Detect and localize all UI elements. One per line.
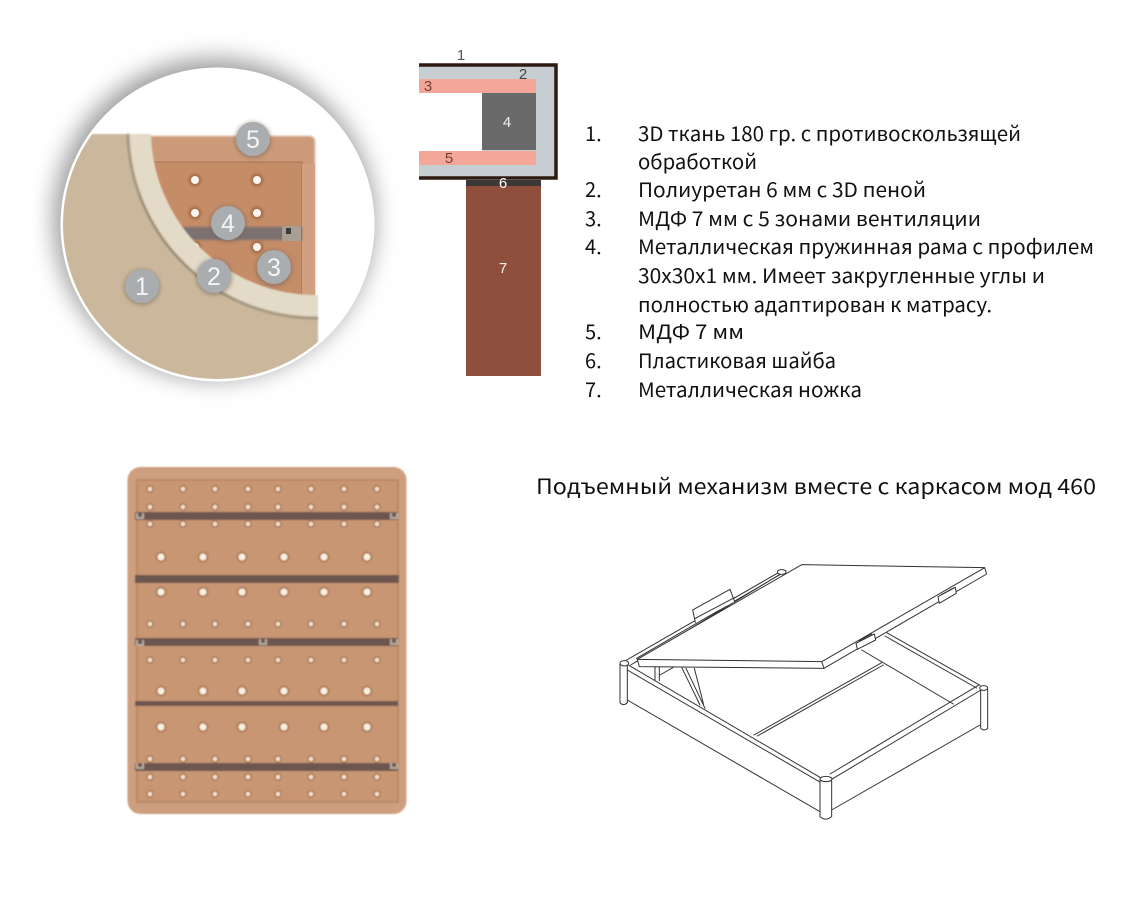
handle strap [693, 589, 735, 622]
numbered parts list: обработкой [638, 146, 757, 175]
numbered parts list: 5. [585, 316, 602, 345]
metal bar [175, 227, 302, 240]
numbered parts list: 1. [585, 118, 602, 147]
cross-section diagram: 6 [499, 175, 507, 192]
cavity [419, 93, 482, 151]
cross-section diagram [419, 47, 556, 376]
wood base corner [140, 136, 315, 300]
corner posts [620, 664, 627, 705]
plastic washer [466, 180, 541, 186]
metal profile [482, 93, 536, 150]
metal slats [135, 512, 399, 771]
ventilation holes [195, 180, 257, 247]
cross-section diagram: 7 [499, 260, 507, 277]
MDF top [419, 79, 536, 93]
numbered parts list: Металлическая пружинная рама с профилем [638, 231, 1094, 260]
hinges [938, 587, 956, 603]
numbered parts list: полностью адаптирован к матрасу. [638, 289, 992, 318]
panel board [128, 467, 406, 814]
numbered parts list: МДФ 7 мм [638, 316, 744, 345]
cross-section diagram: 4 [503, 114, 511, 131]
numbered parts list: 6. [585, 345, 602, 374]
cross-section diagram: 3 [424, 78, 432, 95]
cross-section diagram: 5 [445, 150, 453, 167]
numbered parts list: Металлическая ножка [638, 374, 862, 403]
number badges: 3 [267, 254, 281, 282]
gas struts [655, 667, 705, 708]
outer fabric line [419, 65, 556, 178]
line drawing: bed frame with lift mechanism [620, 565, 988, 819]
heading: lift mechanism: Подъемный механизм вместе с каркасом мод 460 [536, 471, 1096, 501]
numbered parts list: Пластиковая шайба [638, 345, 836, 374]
number badges: 5 [246, 126, 260, 154]
lid [637, 565, 987, 668]
numbered parts list: МДФ 7 мм с 5 зонами вентиляции [638, 203, 981, 232]
numbered parts list: 3. [585, 203, 602, 232]
number badges: 1 [135, 273, 149, 301]
numbered parts list: 2. [585, 174, 602, 203]
number badges [124, 122, 292, 305]
frame [627, 665, 820, 812]
numbered parts list: 3D ткань 180 гр. с противоскользящей [638, 118, 1021, 147]
cross-section diagram: 1 [457, 47, 465, 64]
slatted base panel [128, 467, 406, 814]
slat brackets [137, 513, 397, 768]
detail circle: corner close-up [50, 59, 374, 400]
numbered parts list [585, 118, 1094, 403]
numbered parts list: 4. [585, 231, 602, 260]
number badges: 4 [221, 210, 235, 238]
numbered parts list: Полиуретан 6 мм с 3D пеной [638, 174, 926, 203]
MDF bottom [419, 151, 536, 165]
numbered parts list: 7. [585, 374, 602, 403]
back rail [627, 571, 786, 665]
number badges: 2 [207, 263, 221, 291]
numbered parts list: 30x30x1 мм. Имеет закругленные углы и [638, 260, 1045, 289]
beige fabric [63, 133, 319, 379]
cross-section diagram: 2 [519, 66, 527, 83]
metal leg [466, 186, 541, 376]
grey polyurethane layer [419, 65, 556, 178]
foam band [128, 134, 318, 318]
holes [150, 489, 377, 794]
